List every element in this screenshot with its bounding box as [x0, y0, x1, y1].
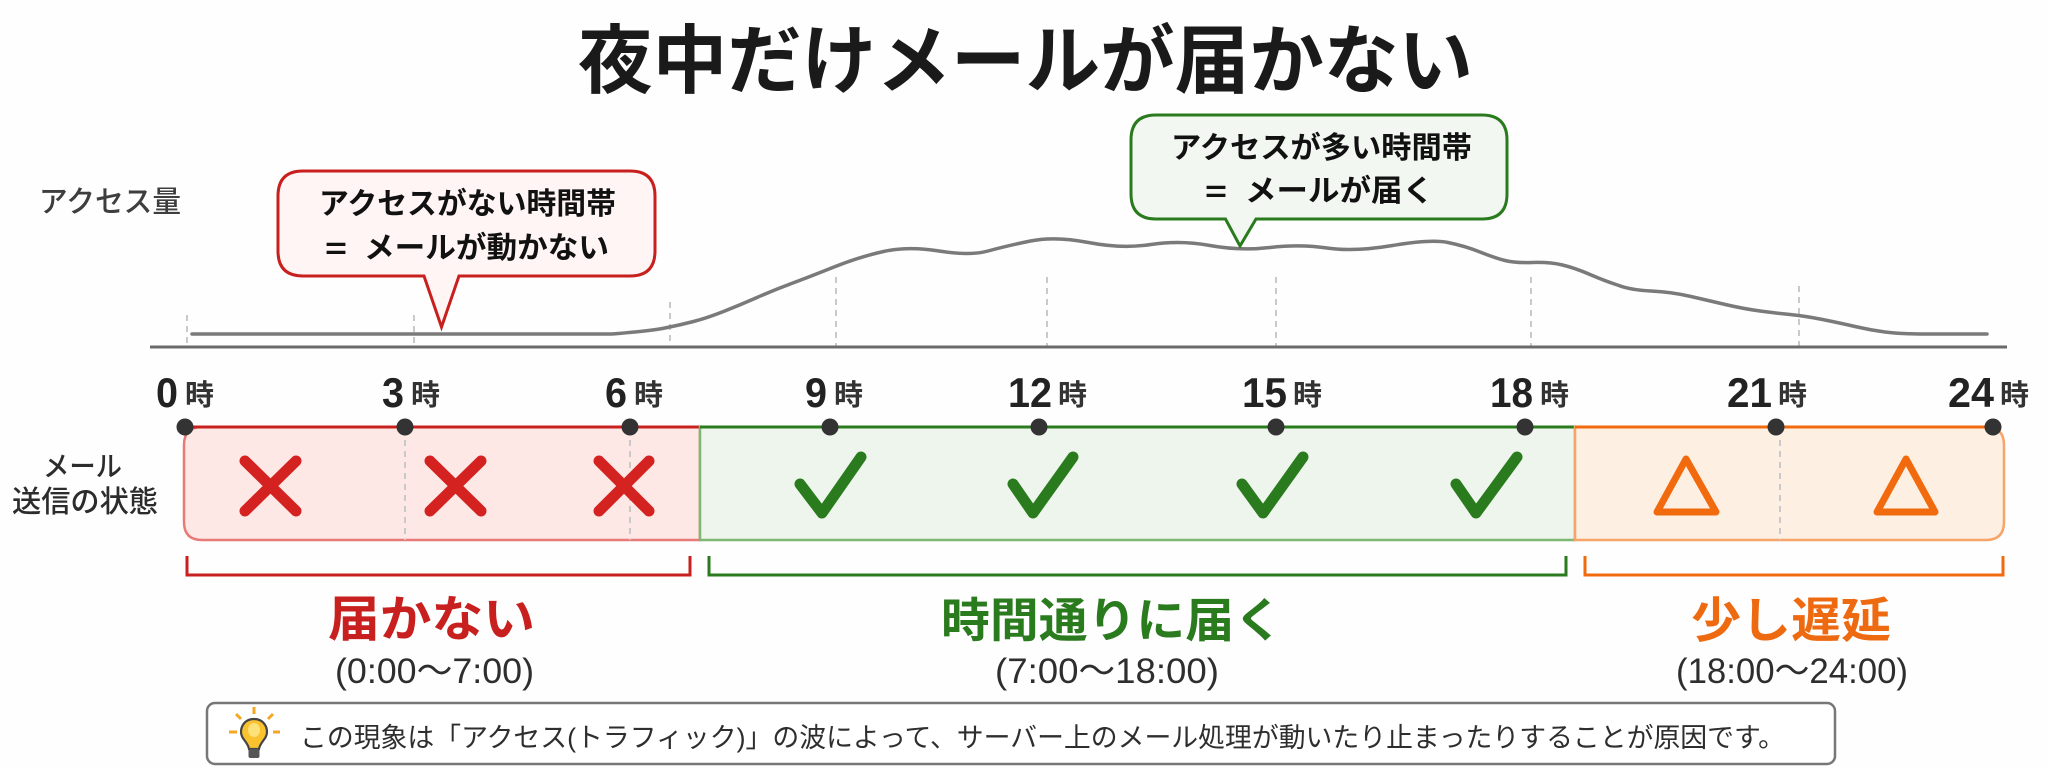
tick: 24 — [1948, 369, 2029, 436]
title: 夜中だけメールが届かない — [578, 19, 1473, 103]
bracket: not delivered — [187, 556, 690, 575]
callout: high access: = — [1205, 175, 1227, 208]
tick: 3: 3 — [382, 369, 404, 416]
tick: 18: 時 — [1540, 379, 1569, 412]
tick: 12 — [1008, 369, 1087, 436]
icon: check 4 — [1456, 457, 1517, 513]
tick: 0: 0 — [156, 369, 178, 416]
hour labels and markers — [156, 369, 2029, 436]
row label: mail sending status: 送信の状態 — [12, 486, 158, 519]
status bar: not delivered segment — [184, 427, 700, 540]
tick: 21: 21 — [1727, 369, 1772, 416]
callout: no access: メールが動かない — [364, 231, 609, 265]
icon: cross 1 — [245, 461, 296, 511]
tick: 9: 時 — [834, 379, 863, 412]
icon: check 2 — [1013, 457, 1073, 513]
callout: no access: アクセスがない時間帯 — [319, 187, 616, 221]
tick: 18: 18 — [1490, 369, 1533, 416]
icon: triangle 2 — [1877, 459, 1935, 512]
axis label: access volume: アクセス量 — [39, 186, 181, 219]
tick: 6 — [605, 369, 663, 436]
callout: no access — [278, 171, 655, 327]
label: delayed: 少し遅延 — [1691, 595, 1891, 648]
tick: 6: 時 — [634, 379, 663, 412]
icon: cross 2 — [430, 461, 481, 511]
tick: 12: 12 — [1008, 369, 1052, 416]
label: not delivered — [328, 593, 535, 691]
label: on time — [941, 594, 1283, 691]
icon: cross 3 — [599, 461, 649, 511]
row label: mail sending status — [12, 451, 158, 519]
bracket: on time — [709, 556, 1566, 575]
callout: high access: メールが届く — [1245, 174, 1434, 208]
label: on time: (7:00〜18:00) — [995, 652, 1219, 691]
tick: 3 — [382, 369, 440, 436]
label: on time: 時間通りに届く — [941, 594, 1283, 647]
label: delayed — [1676, 595, 1908, 691]
row label: mail sending status: メール — [43, 451, 122, 482]
label: not delivered: 届かない — [328, 593, 535, 647]
tick: 6: 6 — [605, 369, 627, 416]
tick: 0 — [156, 369, 214, 436]
label: not delivered: (0:00〜7:00) — [335, 652, 534, 691]
icon: triangle 1 — [1657, 459, 1716, 512]
tick: 21 — [1727, 369, 1807, 436]
note text: この現象は「アクセス(トラフィック)」の波によって、サーバー上のメール処理が動いたり止まったりすることが原因です。 — [300, 723, 1785, 753]
tick: 24: 24 — [1948, 369, 1995, 416]
callout: high access — [1131, 115, 1507, 246]
tick: 15 — [1242, 369, 1322, 436]
tick: 21: 時 — [1778, 379, 1807, 412]
tick: 3: 時 — [411, 379, 440, 412]
icon: check 1 — [800, 457, 861, 513]
tick: 18 — [1490, 369, 1569, 436]
icon: check 3 — [1242, 457, 1303, 513]
tick: 9: 9 — [805, 369, 827, 416]
bracket: delayed — [1585, 556, 2003, 575]
status bar: delayed segment — [1575, 427, 2004, 540]
tick: 9 — [805, 369, 863, 436]
callout: no access: = — [325, 232, 347, 265]
traffic chart — [150, 239, 2007, 347]
note box — [207, 703, 1835, 764]
tick: 24: 時 — [2000, 379, 2029, 412]
tick: 12: 時 — [1058, 379, 1087, 412]
tick: 0: 時 — [185, 379, 214, 412]
tick: 15: 15 — [1242, 369, 1287, 416]
icon: light bulb — [229, 707, 280, 758]
status bar: on-time segment — [700, 427, 1575, 540]
label: delayed: (18:00〜24:00) — [1676, 652, 1908, 691]
tick: 15: 時 — [1293, 379, 1322, 412]
callout: high access: アクセスが多い時間帯 — [1171, 131, 1472, 165]
